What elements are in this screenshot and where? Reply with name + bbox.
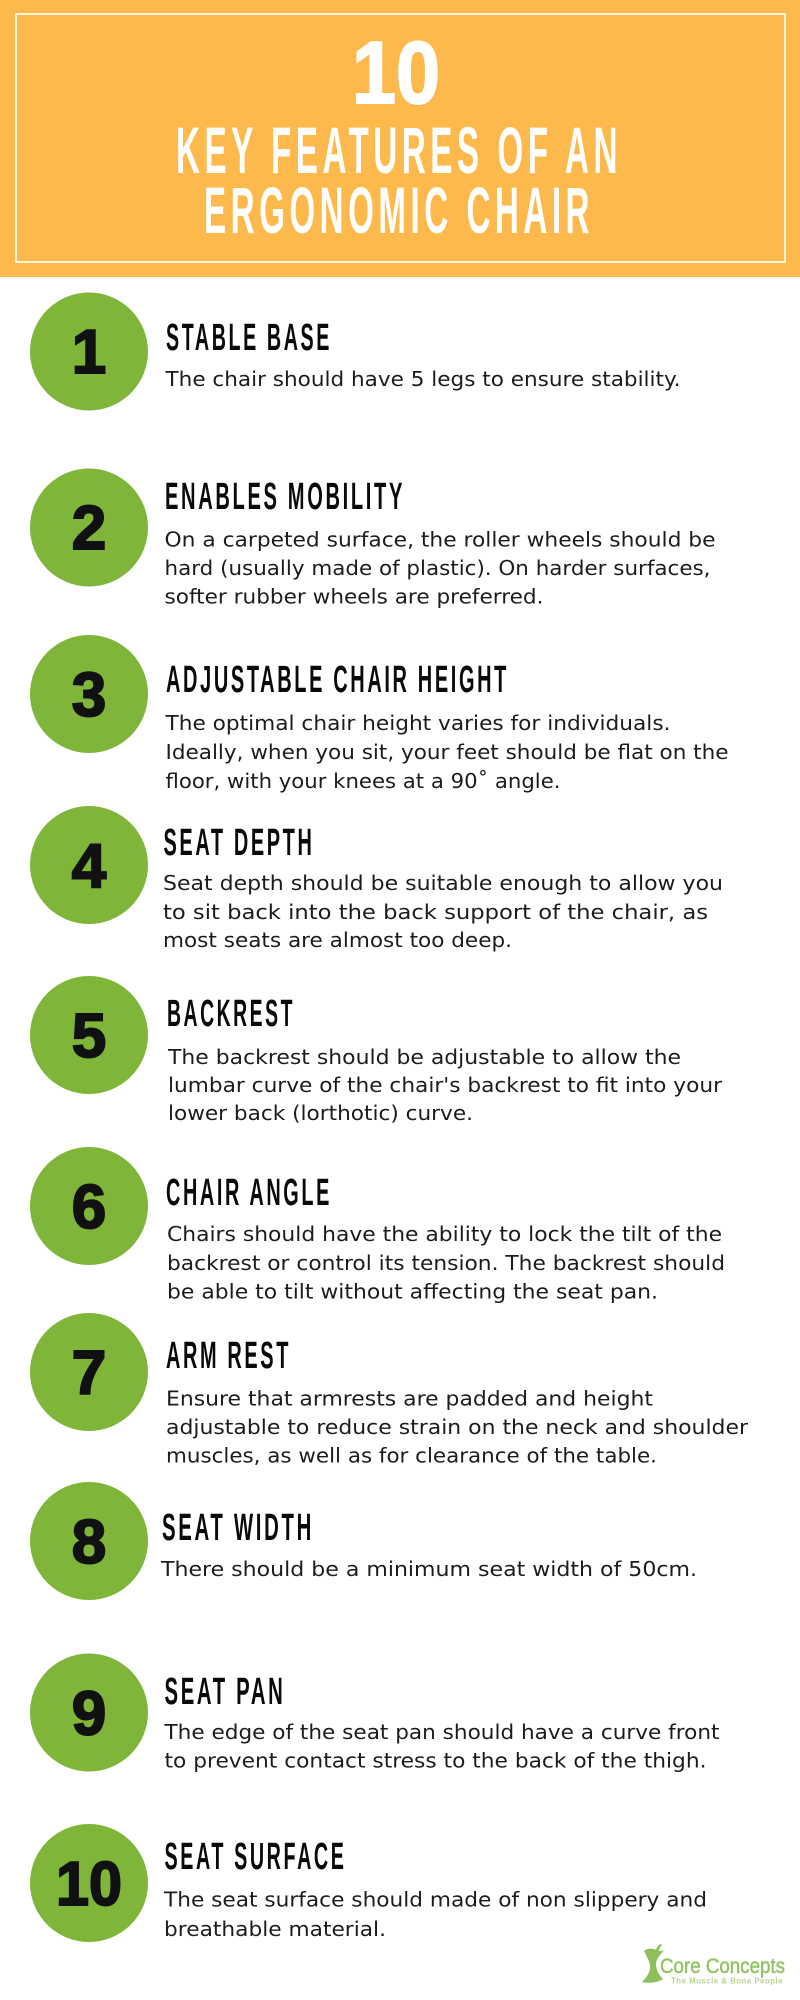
- title: [176, 23, 622, 247]
- feature 4: seat depth: Seat depth should be suitable enough to allow you: [163, 871, 723, 895]
- feature 1: stable base: STABLE BASE: [166, 317, 332, 359]
- feature 5: backrest: 5: [72, 1002, 106, 1071]
- feature 2: enables mobility: [30, 468, 716, 608]
- feature 1: stable base: [30, 292, 680, 410]
- feature 3: adjustable chair height: Ideally, when you sit, your feet should be flat on the: [166, 740, 728, 764]
- logo: core concepts: [642, 1944, 785, 1986]
- feature 2: enables mobility: 2: [72, 494, 106, 563]
- feature 7: arm rest: Ensure that armrests are padded and height: [166, 1386, 653, 1410]
- feature 3: adjustable chair height: 3: [72, 661, 106, 730]
- feature 1: stable base: 1: [72, 318, 106, 387]
- feature 9: seat pan: 9: [72, 1680, 106, 1748]
- feature 8: seat width: SEAT WIDTH: [162, 1507, 314, 1549]
- feature 5: backrest: lumbar curve of the chair's backrest to fit into your: [168, 1073, 723, 1097]
- feature 5: backrest: lower back (lorthotic) curve.: [168, 1101, 473, 1125]
- feature 2: enables mobility: ENABLES MOBILITY: [165, 476, 405, 518]
- feature 2: enables mobility: softer rubber wheels are preferred.: [164, 584, 544, 608]
- feature 4: seat depth: to sit back into the back support of the chair, as: [163, 900, 708, 924]
- feature 9: seat pan: The edge of the seat pan should have a curve front: [163, 1720, 720, 1744]
- feature 10: seat surface: [30, 1824, 707, 1942]
- logo: core concepts: Core Concepts: [660, 1955, 785, 1978]
- feature 6: chair angle: [30, 1147, 725, 1304]
- feature 3: adjustable chair height: floor, with your knees at a 90˚ angle.: [166, 769, 560, 793]
- feature 7: arm rest: adjustable to reduce strain on the neck and shoulder: [166, 1415, 749, 1439]
- feature 6: chair angle: Chairs should have the ability to lock the tilt of the: [167, 1222, 722, 1246]
- feature 7: arm rest: muscles, as well as for clearance of the table.: [166, 1444, 657, 1468]
- feature 9: seat pan: SEAT PAN: [164, 1671, 286, 1713]
- feature 4: seat depth: most seats are almost too deep.: [163, 928, 512, 952]
- feature 2: enables mobility: hard (usually made of plastic). On harder surfaces,: [164, 556, 711, 580]
- logo: core concepts: The Muscle & Bone People: [671, 1976, 783, 1986]
- feature 2: enables mobility: On a carpeted surface, the roller wheels should be: [164, 528, 716, 552]
- icon: apple core: [642, 1944, 664, 1983]
- feature 4: seat depth: [30, 806, 723, 952]
- feature 5: backrest: [30, 976, 723, 1125]
- feature 6: chair angle: backrest or control its tension. The backrest should: [167, 1251, 725, 1275]
- feature 10: seat surface: The seat surface should made of non slippery and: [163, 1888, 707, 1912]
- feature 9: seat pan: to prevent contact stress to the back of the thigh.: [164, 1748, 706, 1772]
- feature 7: arm rest: [30, 1313, 749, 1468]
- feature 4: seat depth: SEAT DEPTH: [164, 822, 314, 864]
- feature 6: chair angle: 6: [72, 1173, 106, 1242]
- feature 10: seat surface: 10: [56, 1850, 122, 1919]
- title: 10: [352, 23, 440, 122]
- feature 10: seat surface: breathable material.: [164, 1917, 386, 1941]
- feature 3: adjustable chair height: ADJUSTABLE CHAIR HEIGHT: [166, 659, 509, 701]
- feature 5: backrest: BACKREST: [167, 993, 295, 1035]
- feature 6: chair angle: CHAIR ANGLE: [166, 1172, 332, 1214]
- feature 8: seat width: [30, 1482, 697, 1600]
- feature 7: arm rest: ARM REST: [166, 1335, 291, 1377]
- feature 9: seat pan: [30, 1654, 720, 1772]
- feature 7: arm rest: 7: [72, 1339, 106, 1408]
- feature 1: stable base: The chair should have 5 legs to ensure stability.: [164, 367, 681, 391]
- feature 3: adjustable chair height: The optimal chair height varies for individuals.: [164, 711, 670, 735]
- feature 4: seat depth: 4: [72, 832, 107, 901]
- feature 8: seat width: There should be a minimum seat width of 50cm.: [160, 1557, 697, 1581]
- feature 10: seat surface: SEAT SURFACE: [164, 1836, 346, 1878]
- feature 8: seat width: 8: [72, 1508, 106, 1577]
- feature 3: adjustable chair height: [30, 635, 728, 793]
- feature 5: backrest: The backrest should be adjustable to allow the: [167, 1045, 681, 1069]
- header banner: [0, 0, 800, 277]
- feature 6: chair angle: be able to tilt without affecting the seat pan.: [167, 1280, 658, 1304]
